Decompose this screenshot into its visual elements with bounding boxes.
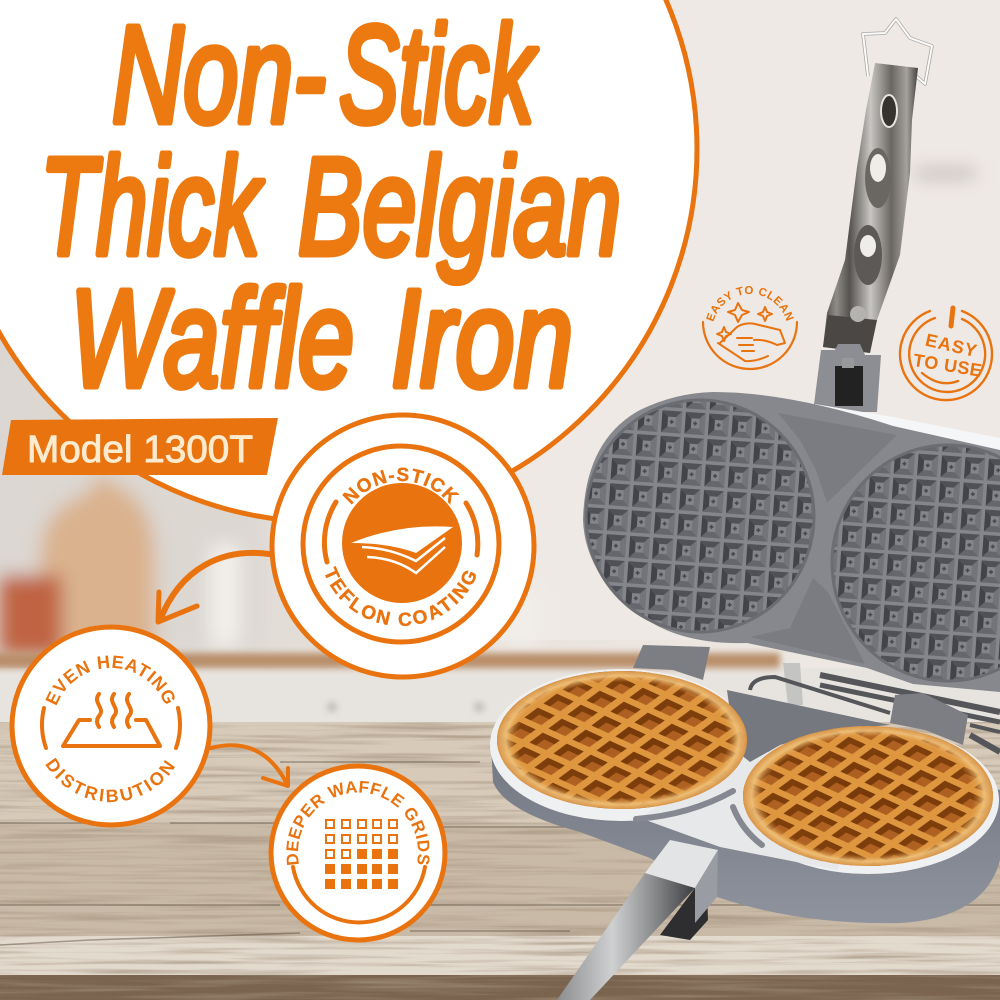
badge: easy to use: EASY xyxy=(923,330,980,361)
title: Thick xyxy=(40,130,264,284)
icon: waffle grid xyxy=(326,820,397,888)
badge: deeper waffle grids: DEEPER WAFFLE GRIDS xyxy=(286,780,430,865)
recess: top xyxy=(778,413,897,503)
waffle: right xyxy=(743,726,993,866)
badge: even heating distribution: EVEN HEATING xyxy=(45,656,175,706)
background: blurred kitchen wall xyxy=(0,0,1000,725)
badge: easy to use xyxy=(900,308,992,400)
cooking surface: right xyxy=(832,445,1000,681)
model tag xyxy=(2,418,278,475)
badge: even heating distribution xyxy=(10,624,212,828)
title: Waffle xyxy=(70,262,354,416)
waffle iron: upper chrome handle xyxy=(813,63,918,412)
icon: heated pan xyxy=(63,694,160,746)
background: wooden table xyxy=(0,722,1000,1000)
model tag: Model 1300T xyxy=(27,429,253,471)
title: Iron xyxy=(391,262,573,416)
title: Non- xyxy=(112,0,326,152)
badge: non-stick teflon coating: NON-STICK xyxy=(342,468,460,505)
badge: easy to use: TO USE xyxy=(912,350,984,381)
arrow: non-stick to even heating xyxy=(158,553,289,622)
waffle iron: handle loop xyxy=(863,19,932,84)
title circle xyxy=(0,0,697,522)
waffle iron: hinges and power cord xyxy=(633,645,1000,752)
title: Stick xyxy=(339,0,538,152)
badge: non-stick teflon coating: TEFLON COATING xyxy=(325,566,476,626)
handle bracket xyxy=(813,344,881,412)
recess: bottom xyxy=(750,578,865,664)
icon: hand and sparkles xyxy=(717,303,785,361)
icon: coating layers xyxy=(342,483,462,603)
badge: non-stick teflon coating xyxy=(270,412,536,680)
title xyxy=(40,0,621,416)
waffle iron: upper plate xyxy=(583,392,1000,692)
title: Belgian xyxy=(298,130,621,284)
cooking surface: left xyxy=(586,400,814,632)
badge: easy to clean: EASY TO CLEAN xyxy=(706,286,794,322)
badge: deeper waffle grids xyxy=(268,764,448,942)
waffle iron: lower body top xyxy=(490,669,999,874)
badge: even heating distribution: DISTRIBUTION xyxy=(46,758,175,802)
waffle iron: lower handle xyxy=(557,840,718,1000)
badge: easy to clean xyxy=(702,286,798,370)
waffle: left xyxy=(497,671,747,809)
waffle iron: lower body side xyxy=(491,720,1000,923)
arrow: even heating to deeper grids xyxy=(211,745,288,786)
